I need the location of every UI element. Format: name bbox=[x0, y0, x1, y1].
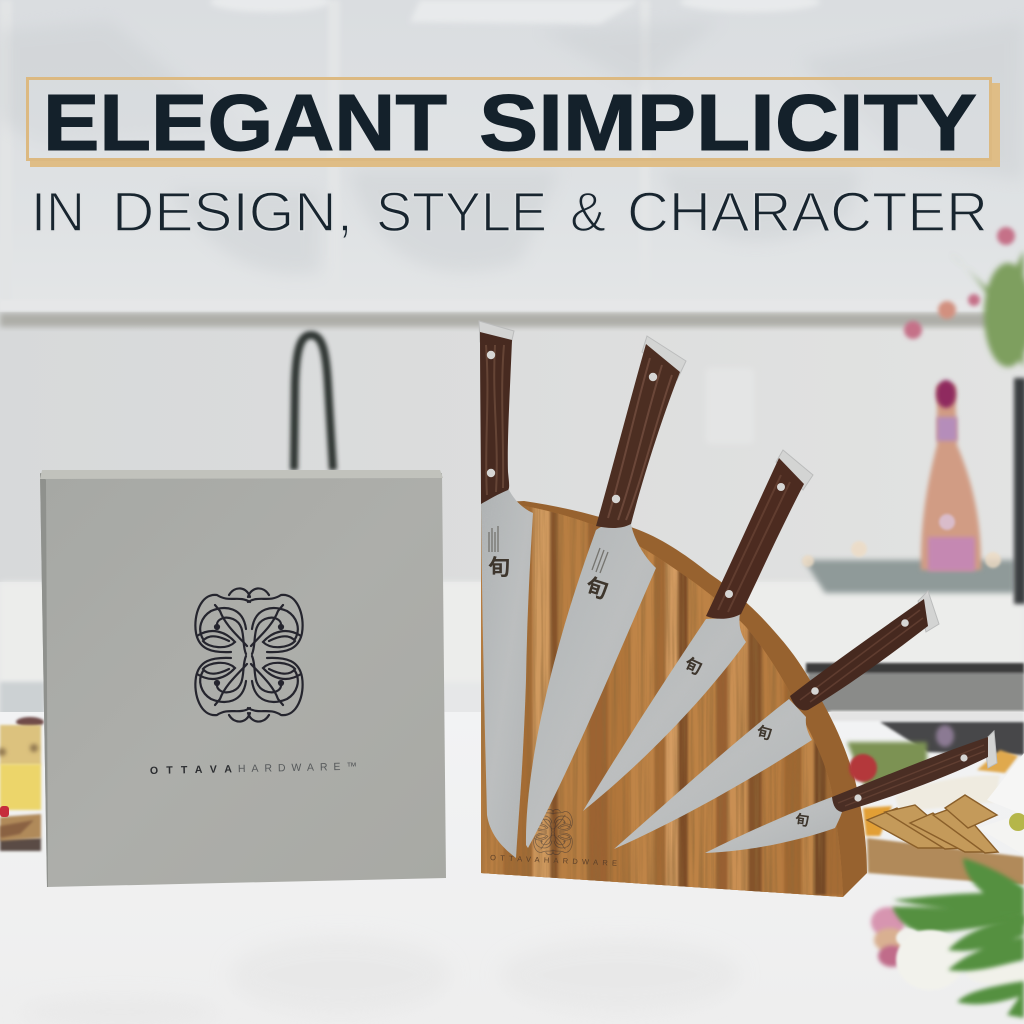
knife 4: utility knife bbox=[614, 591, 939, 849]
heading: ELEGANT bbox=[43, 78, 447, 167]
board bbox=[0, 814, 41, 841]
orange right bbox=[977, 750, 1018, 773]
rivets bbox=[612, 373, 657, 503]
blade bbox=[526, 522, 656, 848]
Shun logo: 旬 bbox=[794, 811, 810, 829]
subheading: CHARACTER bbox=[627, 180, 988, 243]
subheading: STYLE bbox=[376, 180, 547, 243]
handle grain bbox=[608, 358, 672, 520]
Shun logo: 旬 bbox=[582, 573, 611, 604]
wooden board bbox=[867, 838, 1024, 885]
handle grain bbox=[800, 610, 923, 702]
cabinet lip bbox=[0, 300, 1024, 311]
pink tulip bbox=[871, 907, 906, 967]
table reflections bbox=[20, 937, 740, 1024]
heading: SIMPLICITY bbox=[479, 78, 977, 167]
shadow under cabinets bbox=[0, 313, 1024, 327]
soft cheese bbox=[895, 775, 1000, 812]
block rim and side bbox=[481, 501, 867, 897]
blade bbox=[583, 613, 746, 811]
handle cap bbox=[479, 321, 514, 349]
blossoms bbox=[904, 227, 1015, 339]
subheading: DESIGN, bbox=[112, 180, 353, 243]
handle cap bbox=[642, 336, 686, 380]
left food board bbox=[0, 717, 44, 851]
cabinet reflections bbox=[0, 20, 1024, 274]
rivets bbox=[854, 754, 968, 802]
handle bbox=[832, 737, 988, 812]
engraved block logo bbox=[534, 809, 572, 855]
subheading bbox=[31, 180, 988, 243]
fruit and greens bbox=[847, 742, 927, 790]
handle cap bbox=[984, 731, 997, 768]
tulips bbox=[871, 858, 1024, 1018]
box wordmark: OTTAVA bbox=[150, 763, 232, 777]
knife 2: chef knife bbox=[526, 336, 686, 848]
dark vase bbox=[1014, 378, 1024, 604]
handle cap bbox=[776, 450, 813, 490]
blade engraving bbox=[592, 548, 608, 573]
box logo: ottava knot bbox=[195, 588, 303, 722]
small white bud bbox=[896, 929, 920, 947]
rivets bbox=[811, 619, 909, 695]
blade bbox=[614, 699, 812, 849]
subheading: & bbox=[570, 180, 606, 243]
box top edge bbox=[40, 470, 443, 479]
board shadow bbox=[0, 838, 41, 851]
box wordmark bbox=[150, 761, 357, 777]
blade engraving bbox=[489, 526, 498, 552]
front table bbox=[0, 712, 1024, 1024]
subheading: IN bbox=[31, 180, 85, 243]
upper cabinets bbox=[0, 0, 1024, 312]
far table strip bbox=[830, 711, 1024, 721]
olive bbox=[1009, 813, 1024, 831]
rivets bbox=[725, 483, 785, 598]
blade bbox=[481, 488, 533, 858]
Shun logo: 旬 bbox=[754, 722, 774, 744]
cheese bbox=[0, 725, 41, 765]
strawberry bbox=[849, 754, 877, 782]
title panel bbox=[28, 78, 990, 160]
tomato bbox=[0, 806, 9, 817]
orange slices bbox=[863, 806, 892, 836]
crackers bbox=[867, 795, 998, 853]
tray bbox=[804, 560, 1015, 593]
cheese slices bbox=[0, 764, 41, 810]
blade bbox=[705, 797, 842, 853]
food on right board bbox=[847, 742, 1024, 885]
wood grain texture bbox=[481, 508, 830, 896]
gold offset shadow bbox=[30, 83, 1000, 167]
handle grain bbox=[718, 475, 790, 612]
box wordmark: HARDWARE™ bbox=[238, 761, 357, 775]
handle grain bbox=[838, 745, 985, 806]
front leaves bbox=[948, 915, 1024, 1018]
leaves bbox=[892, 858, 1024, 933]
backsplash bbox=[0, 312, 1024, 582]
knife 3: santoku bbox=[583, 450, 813, 811]
glass cooktop bbox=[880, 722, 1024, 755]
wood stripes bbox=[481, 495, 846, 895]
handle bbox=[790, 599, 928, 710]
blurred faucet bbox=[294, 335, 333, 470]
box left edge bbox=[40, 473, 48, 887]
handle bbox=[480, 332, 512, 504]
white tulip bbox=[896, 930, 964, 990]
knife 1: bread knife bbox=[479, 321, 533, 858]
cheese specks bbox=[0, 744, 38, 756]
outlet bbox=[706, 368, 754, 444]
engraved block wordmark: OTTAVAHARDWARE bbox=[490, 853, 617, 868]
heading bbox=[43, 78, 977, 167]
white tulip right bbox=[966, 961, 1024, 985]
dark berry bbox=[16, 717, 44, 727]
handle bbox=[596, 344, 680, 528]
knife 5: paring knife bbox=[705, 731, 997, 853]
blurred tray, bottle, flowers bbox=[802, 227, 1024, 604]
leaves bbox=[950, 250, 1024, 368]
Shun logo: 旬 bbox=[681, 653, 705, 679]
rivets bbox=[487, 351, 495, 477]
handle grain bbox=[486, 345, 504, 495]
bottle bbox=[921, 385, 981, 570]
bokeh lights bbox=[802, 541, 1001, 568]
box front bbox=[40, 473, 446, 887]
handle bbox=[706, 458, 804, 619]
white plates bbox=[987, 753, 1024, 815]
title block bbox=[28, 78, 1000, 243]
block front face bbox=[481, 506, 843, 897]
back counter bbox=[0, 582, 1024, 682]
appliance band bbox=[808, 672, 1024, 712]
cabinet highlights at top bbox=[210, 0, 820, 24]
wooden knife block bbox=[470, 490, 870, 910]
Shun logo: 旬 bbox=[488, 555, 510, 580]
gift box bbox=[40, 470, 446, 887]
handle cap bbox=[918, 591, 939, 632]
